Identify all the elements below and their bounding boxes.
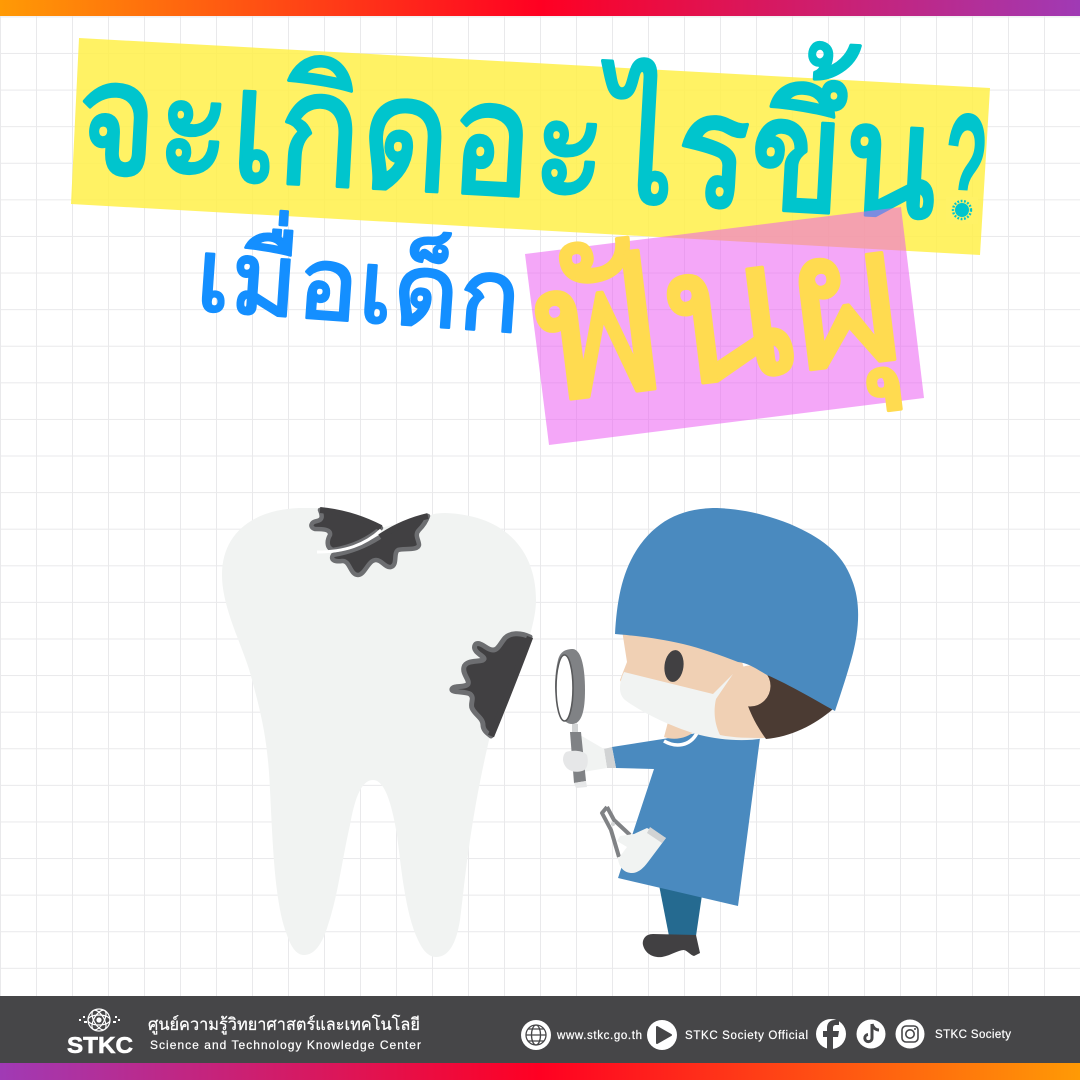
- organisation name Thai: ศูนย์ความรู้วิทยาศาสตร์และเทคโนโลยี: [148, 1014, 420, 1035]
- surgical cap: [615, 508, 858, 711]
- cavity: top left: [311, 510, 381, 550]
- logo wordmark: STKC: [67, 1032, 133, 1058]
- gown: [612, 733, 760, 906]
- raised arm cuff: [604, 747, 616, 768]
- raised hand glove: [570, 735, 607, 772]
- collar: [664, 733, 697, 745]
- icon: tiktok: [856, 1020, 886, 1048]
- lower hand glove: [617, 828, 666, 873]
- STKC logo: [67, 1008, 133, 1058]
- YouTube text: STKC Society Official: [685, 1030, 808, 1042]
- icon: globe: [521, 1020, 551, 1050]
- pink highlight: [525, 207, 924, 445]
- leg: [659, 885, 702, 936]
- top gradient bar: [0, 0, 1080, 16]
- social name text: STKC Society: [935, 1029, 1011, 1041]
- icon: instagram: [896, 1020, 924, 1048]
- shoe: [643, 934, 700, 957]
- cavity: top right: [332, 516, 428, 575]
- bottom gradient bar: [0, 1063, 1080, 1080]
- footer band: [0, 996, 1080, 1063]
- cavity crack: [317, 530, 381, 552]
- raised hand fist: [563, 751, 588, 772]
- icon: facebook: [816, 1019, 846, 1049]
- cavity: side: [452, 634, 530, 736]
- title line 1: จะเกิดอะไรขึ้น: [72, 2, 944, 253]
- face: [620, 630, 765, 738]
- website text: www.stkc.go.th: [556, 1030, 642, 1042]
- doctor illustration: [555, 508, 858, 957]
- title line 2: เมื่อเด็ก: [192, 205, 526, 355]
- eye: [663, 649, 685, 683]
- icon: virus question-mark dot: [946, 197, 978, 224]
- organisation name English: Science and Technology Knowledge Center: [150, 1038, 421, 1052]
- title highlighted word: ฟันผุ: [515, 184, 915, 454]
- magnifying glass: [555, 649, 587, 788]
- neck: [664, 722, 696, 739]
- logo mark: [79, 1008, 120, 1032]
- tooth illustration: [222, 508, 536, 957]
- surgical mask: [620, 672, 765, 740]
- tooth body: [222, 508, 536, 957]
- yellow title highlight: [71, 38, 990, 255]
- icon: play: [647, 1020, 677, 1050]
- title line 1: ?: [939, 79, 992, 258]
- ear: [730, 666, 770, 706]
- hair: [748, 672, 833, 739]
- pliers: [602, 807, 630, 857]
- lower glove cuff: [647, 827, 666, 843]
